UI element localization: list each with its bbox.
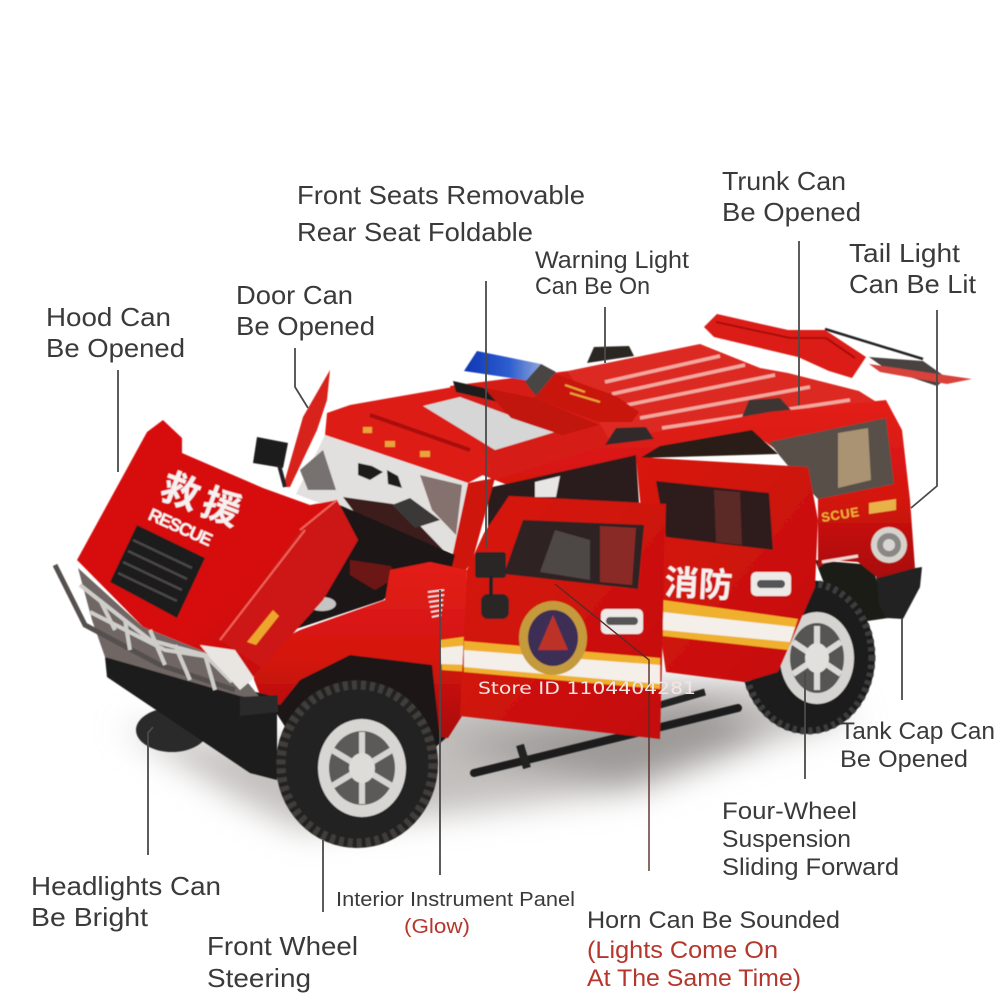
amber cab lights <box>363 427 430 457</box>
leader lines <box>118 241 937 912</box>
warning light bar <box>453 351 654 445</box>
body upper rear side <box>490 400 915 578</box>
label: seats: Front Seats Removable <box>297 180 585 210</box>
fender vent <box>428 590 444 617</box>
headlight <box>200 645 254 690</box>
front door open <box>460 496 666 739</box>
label: suspension: Four-Wheel <box>722 798 857 825</box>
rear side rescue lettering: SCUE <box>820 504 860 525</box>
running board <box>474 692 738 773</box>
rear door characters: 消防 <box>664 564 733 606</box>
label: tail light: Can Be Lit <box>849 269 977 299</box>
front wheel arch <box>268 650 446 750</box>
watermark: Store ID 1104404281 <box>478 679 696 699</box>
label: hood: Hood Can <box>46 302 171 332</box>
bumper end <box>240 695 278 716</box>
roof front base <box>450 371 612 480</box>
hood rescue text: RESCUE <box>145 504 216 550</box>
label: tank cap: Be Opened <box>840 746 968 773</box>
label: horn <box>587 907 840 992</box>
interior behind doors <box>488 430 778 545</box>
engine bay <box>293 505 455 630</box>
car model <box>55 314 972 848</box>
front wheel <box>276 680 438 848</box>
label: suspension <box>722 798 899 881</box>
label: steering: Steering <box>207 963 311 993</box>
label: horn: Horn Can Be Sounded <box>587 907 840 934</box>
rear door <box>636 457 818 682</box>
label: door <box>236 280 375 341</box>
label: instrument panel <box>336 889 575 938</box>
label: steering: Front Wheel <box>207 931 358 961</box>
label: warning light: Warning Light <box>535 247 689 274</box>
rear side rescue lettering <box>820 499 896 562</box>
open hood <box>77 420 358 677</box>
rear door stripe <box>663 600 798 650</box>
rear wheel <box>741 580 875 734</box>
label: door: Be Opened <box>236 311 375 341</box>
label: seats <box>297 180 585 247</box>
windshield and cab <box>296 387 555 575</box>
wing mirror <box>253 437 288 487</box>
label: tank cap <box>840 718 995 773</box>
label: suspension: Suspension <box>722 826 851 853</box>
label: horn: At The Same Time) <box>587 965 801 992</box>
label: tail light <box>849 238 977 299</box>
label: tank cap: Tank Cap Can <box>840 718 995 745</box>
label: instrument panel: Interior Instrument Panel <box>336 889 575 911</box>
rear wheel arch <box>815 560 888 625</box>
label: suspension: Sliding Forward <box>722 854 899 881</box>
label: hood: Be Opened <box>46 333 185 363</box>
ground shadow <box>120 680 860 830</box>
label: seats: Rear Seat Foldable <box>297 217 533 247</box>
A pillar <box>445 478 495 575</box>
label: trunk <box>722 166 861 227</box>
hood amber marker <box>247 610 279 645</box>
hood characters: 救援 <box>155 466 246 535</box>
open far door <box>283 370 330 487</box>
front door stripe <box>464 641 660 689</box>
label: door: Door Can <box>236 280 353 310</box>
label: warning light <box>535 247 689 300</box>
chrome brush guard <box>55 565 235 690</box>
sunroof <box>423 397 555 450</box>
label: headlights: Headlights Can <box>31 871 221 901</box>
front door handle <box>601 609 643 634</box>
front door window <box>504 520 644 589</box>
hood grille <box>110 525 205 618</box>
tailgate raised <box>704 314 972 386</box>
label: trunk: Be Opened <box>722 197 861 227</box>
label: trunk: Trunk Can <box>722 166 846 196</box>
rear door handle <box>751 572 791 596</box>
door mirror <box>475 552 509 619</box>
fuel tank cap <box>871 527 907 563</box>
label: headlights <box>31 871 221 932</box>
roof with rack <box>568 344 886 445</box>
rear bumper <box>876 567 922 619</box>
label: hood <box>46 302 185 363</box>
label: instrument panel: (Glow) <box>404 916 470 938</box>
space between hood and bumper <box>78 568 262 700</box>
label: warning light: Can Be On <box>535 273 650 300</box>
bumper <box>105 657 277 780</box>
far front wheel <box>136 708 208 752</box>
rear door window <box>656 481 773 550</box>
fire badge <box>519 601 587 675</box>
label: steering <box>207 931 358 993</box>
rear quarter window <box>769 418 894 499</box>
label: horn: (Lights Come On <box>587 937 778 964</box>
front fender <box>253 562 467 738</box>
label: tail light: Tail Light <box>849 238 961 268</box>
fender stripe <box>440 636 470 672</box>
label: headlights: Be Bright <box>31 902 149 932</box>
